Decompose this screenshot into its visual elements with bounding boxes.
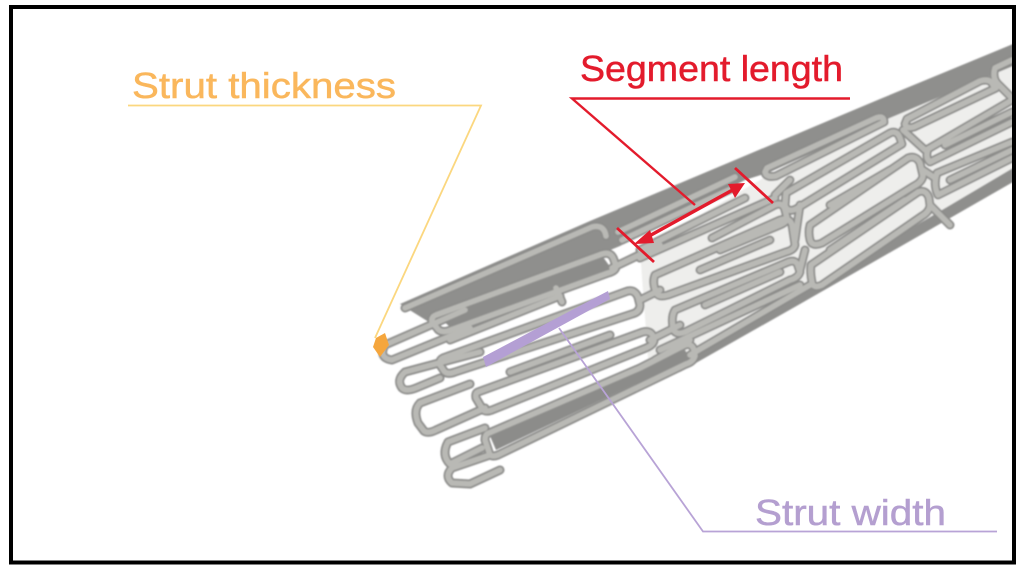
highlighted strut [483,291,610,367]
leader line [559,328,997,532]
double-headed arrow [634,183,745,244]
stent body tone [641,67,1012,358]
label: Strut thickness [132,65,396,106]
right segment tick [735,168,773,203]
left segment tick [617,228,654,262]
stent lattice highlight stroke [383,60,1012,484]
stent illustration [383,44,1013,484]
segment length callout [572,48,850,262]
label: Segment length [580,48,843,89]
strut width callout [483,291,997,533]
orange strut end marker [373,333,389,357]
stent top dark band [400,44,1013,324]
leader line [572,98,850,205]
strut thickness callout [128,65,481,357]
stent lattice shadow stroke [383,60,1012,484]
stent inner dark panels [440,257,690,450]
stent lower dark band [680,168,1013,372]
label: Strut width [755,492,946,533]
leader line [128,106,481,338]
